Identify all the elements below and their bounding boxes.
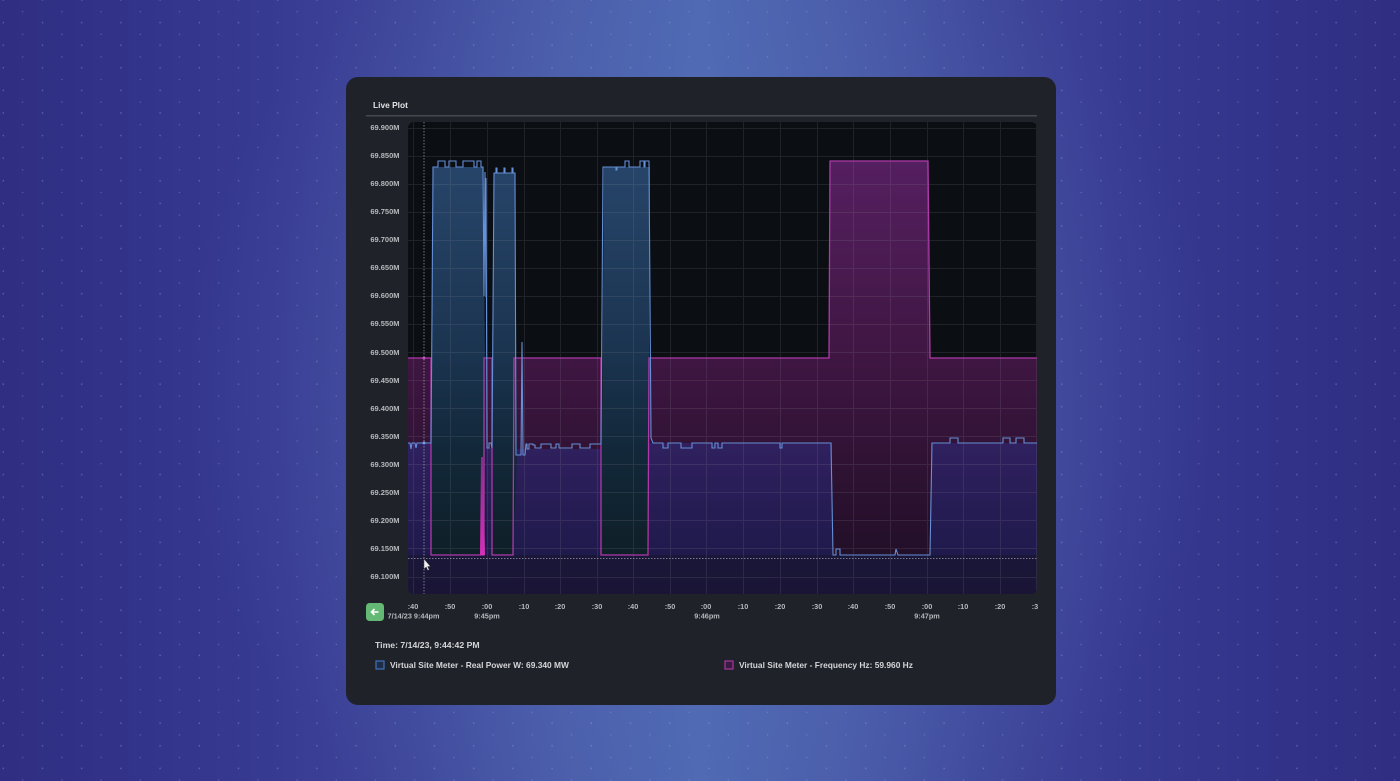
- y axis labels: 69.200M: [370, 516, 400, 525]
- x axis labels: :3: [1032, 602, 1038, 611]
- legend: frequency: Virtual Site Meter - Frequency Hz: 59.960 Hz: [739, 660, 913, 670]
- y axis labels: 69.700M: [370, 235, 400, 244]
- x axis labels: :00: [922, 602, 932, 611]
- x axis labels: 7/14/23 9:44pm: [388, 612, 440, 620]
- x axis labels: :00: [701, 602, 711, 611]
- spike: frequency oscillation: [480, 457, 485, 555]
- x axis labels: :40: [408, 602, 418, 611]
- x axis labels: :10: [958, 602, 968, 611]
- timestamp: Time: 7/14/23, 9:44:42 PM: [375, 640, 480, 650]
- y axis labels: 69.500M: [370, 348, 400, 357]
- y axis labels: 69.150M: [370, 544, 400, 553]
- y axis labels: 69.850M: [370, 151, 400, 160]
- x axis labels: :20: [555, 602, 565, 611]
- y axis labels: 69.300M: [370, 460, 400, 469]
- y axis labels: 69.350M: [370, 432, 400, 441]
- x axis labels: :00: [482, 602, 492, 611]
- y axis labels: 69.250M: [370, 488, 400, 497]
- y axis labels: 69.750M: [370, 207, 400, 216]
- y axis labels: 69.600M: [370, 291, 400, 300]
- x axis labels: [388, 602, 1038, 620]
- area: frequency fill: [408, 161, 1037, 594]
- series line: frequency: [408, 161, 1037, 555]
- y axis labels: 69.550M: [370, 319, 400, 328]
- x axis labels: 9:46pm: [694, 612, 720, 620]
- y axis labels: 69.450M: [370, 376, 400, 385]
- crosshair: [408, 122, 1037, 594]
- x axis labels: :10: [519, 602, 529, 611]
- x axis labels: :30: [592, 602, 602, 611]
- line chart: real power and frequency: [408, 122, 1037, 594]
- x axis labels: :20: [775, 602, 785, 611]
- y axis labels: 69.650M: [370, 263, 400, 272]
- panel: live plot card: [346, 77, 1056, 705]
- legend: real power: Virtual Site Meter - Real Power W: 69.340 MW: [390, 660, 569, 670]
- x axis labels: :50: [445, 602, 455, 611]
- x axis labels: :50: [885, 602, 895, 611]
- x axis labels: :30: [812, 602, 822, 611]
- y axis labels: [370, 123, 400, 581]
- x axis labels: 9:45pm: [474, 612, 500, 620]
- area: real power columns: [431, 167, 650, 555]
- button: back arrow: [366, 603, 384, 621]
- y axis labels: 69.900M: [370, 123, 400, 132]
- x axis labels: :40: [848, 602, 858, 611]
- x axis labels: :40: [628, 602, 638, 611]
- icon: mouse cursor: [424, 559, 430, 570]
- area: real power overlap fill: [408, 443, 1037, 594]
- series line: real power: [408, 161, 1037, 555]
- x axis labels: 9:47pm: [914, 612, 940, 620]
- heading: Live Plot: Live Plot: [373, 100, 408, 110]
- grid lines: [408, 122, 1037, 594]
- x axis labels: :20: [995, 602, 1005, 611]
- x axis labels: :10: [738, 602, 748, 611]
- y axis labels: 69.400M: [370, 404, 400, 413]
- y axis labels: 69.100M: [370, 572, 400, 581]
- y axis labels: 69.800M: [370, 179, 400, 188]
- x axis labels: :50: [665, 602, 675, 611]
